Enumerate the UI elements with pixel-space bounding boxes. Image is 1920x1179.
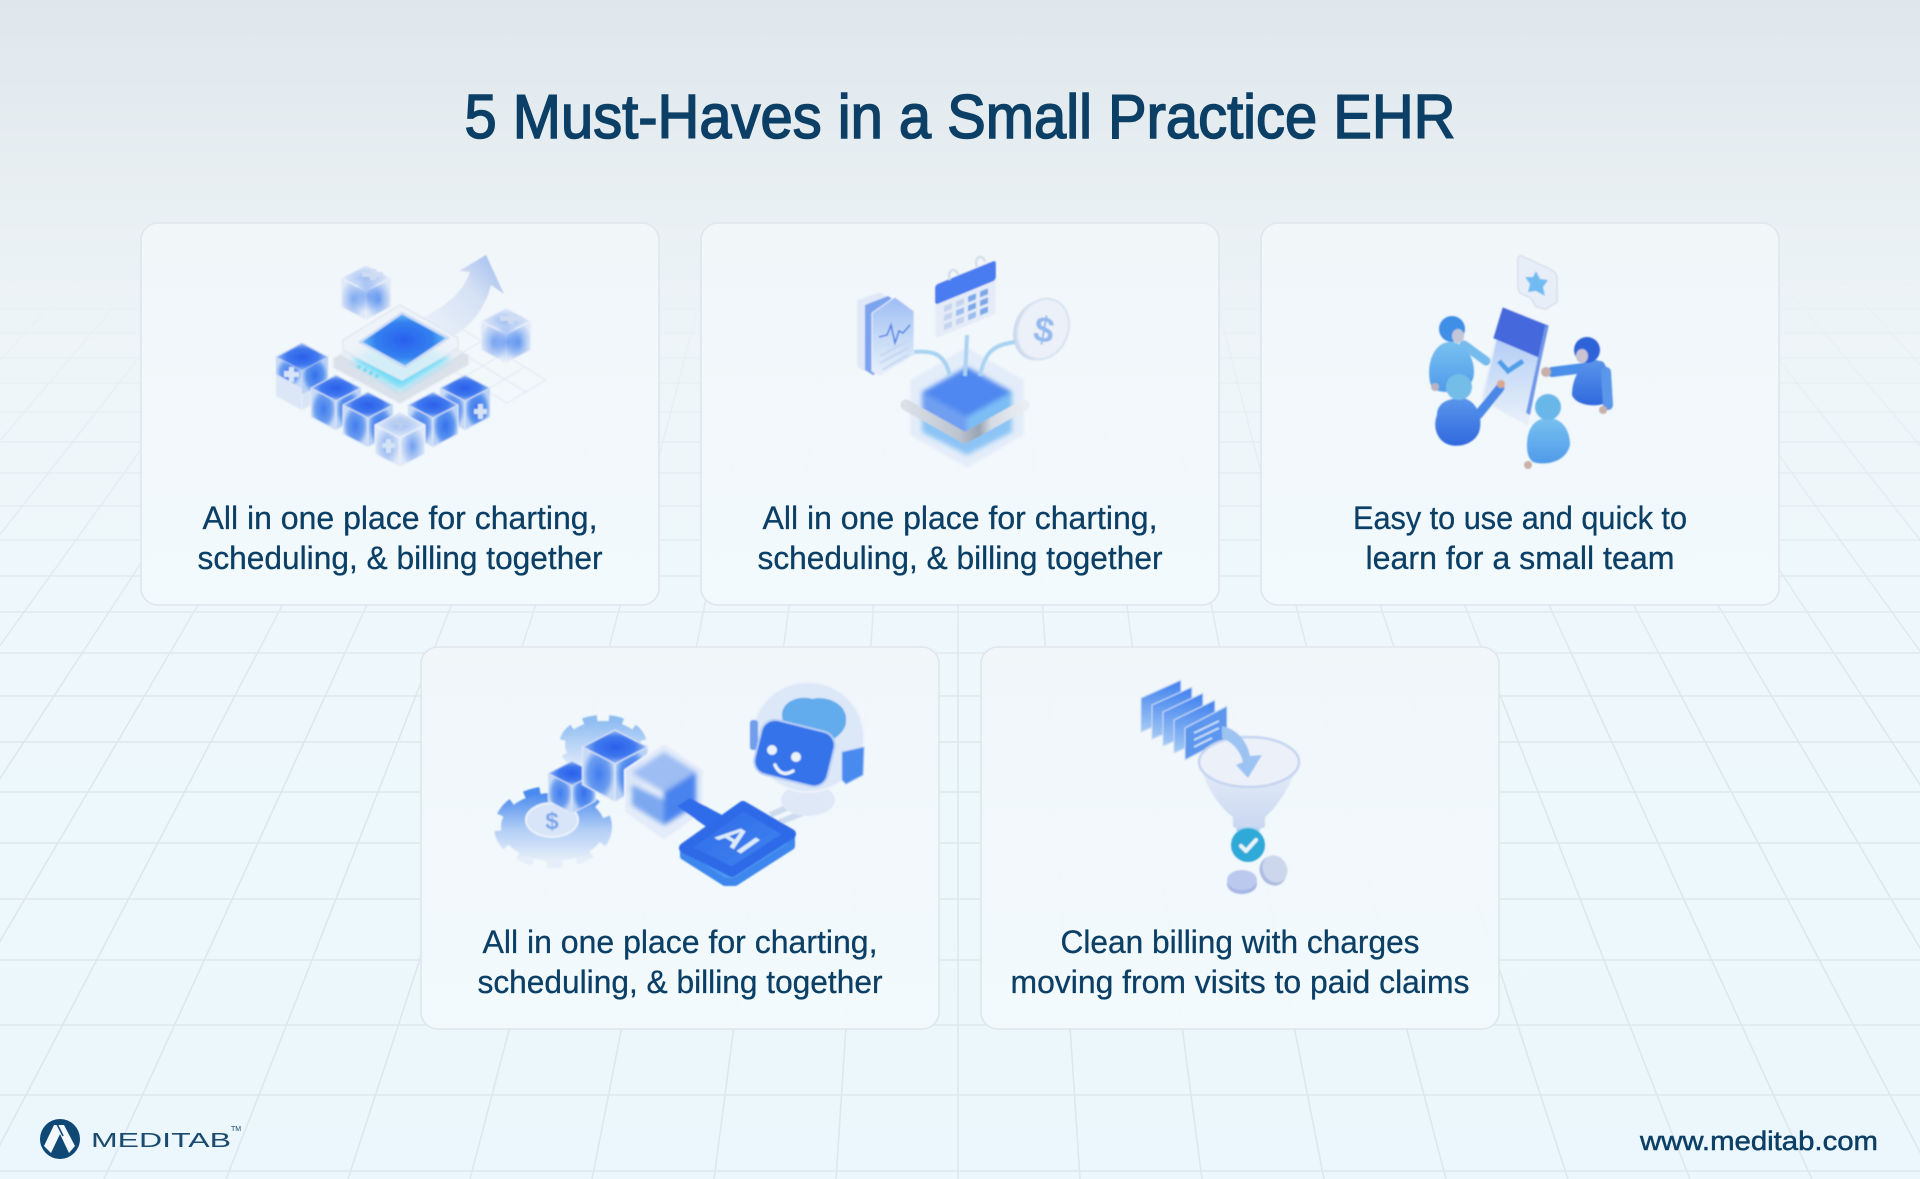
- panel: easy to use card: [1261, 223, 1779, 605]
- card background: [1261, 223, 1779, 605]
- card text: Easy to use and quick to: [1353, 500, 1687, 536]
- icon: gears, cubes, AI tile and robot: $: [545, 808, 559, 835]
- card text: All in one place for charting,: [762, 500, 1158, 536]
- card background: [421, 647, 939, 1029]
- card background: [701, 223, 1219, 605]
- card text: [198, 500, 603, 576]
- card text: scheduling, & billing together: [758, 540, 1163, 576]
- icon: platform with medical cubes and growth arrow: [276, 255, 546, 467]
- card text: [758, 500, 1163, 576]
- panel: all-in-one card 1: [141, 223, 659, 605]
- icon: gears, cubes, AI tile and robot: AI: [707, 820, 767, 859]
- card text: All in one place for charting,: [202, 500, 598, 536]
- website url: www.meditab.com: [1639, 1126, 1878, 1156]
- card text: All in one place for charting,: [482, 924, 878, 960]
- panel: clean billing card: [981, 647, 1499, 1029]
- card text: [1010, 924, 1470, 1000]
- logo: Meditab: MEDITAB: [91, 1130, 231, 1152]
- card text: [478, 924, 883, 1000]
- logo: Meditab: [40, 1119, 241, 1159]
- icon: team around a phone with star bubble: [1429, 256, 1612, 469]
- card text: scheduling, & billing together: [478, 964, 883, 1000]
- logo: Meditab: TM: [231, 1126, 241, 1133]
- title: 5 Must-Haves in a Small Practice EHR: [464, 83, 1456, 152]
- card text: moving from visits to paid claims: [1010, 964, 1470, 1000]
- card text: scheduling, & billing together: [198, 540, 603, 576]
- card text: learn for a small team: [1366, 540, 1674, 576]
- card background: [981, 647, 1499, 1029]
- card text: [1353, 500, 1687, 576]
- panel: automation and AI card: [421, 647, 939, 1029]
- panel: all-in-one card 2: [701, 223, 1219, 605]
- card text: Clean billing with charges: [1060, 924, 1420, 960]
- card background: [141, 223, 659, 605]
- icon: document, calendar and coin feeding a glass cube: $: [1031, 308, 1058, 351]
- icon: gears, cubes, AI tile and robot: [501, 682, 864, 882]
- icon: documents through funnel to paid claim: [1141, 680, 1299, 894]
- icon: document, calendar and coin feeding a glass cube: [857, 257, 1078, 468]
